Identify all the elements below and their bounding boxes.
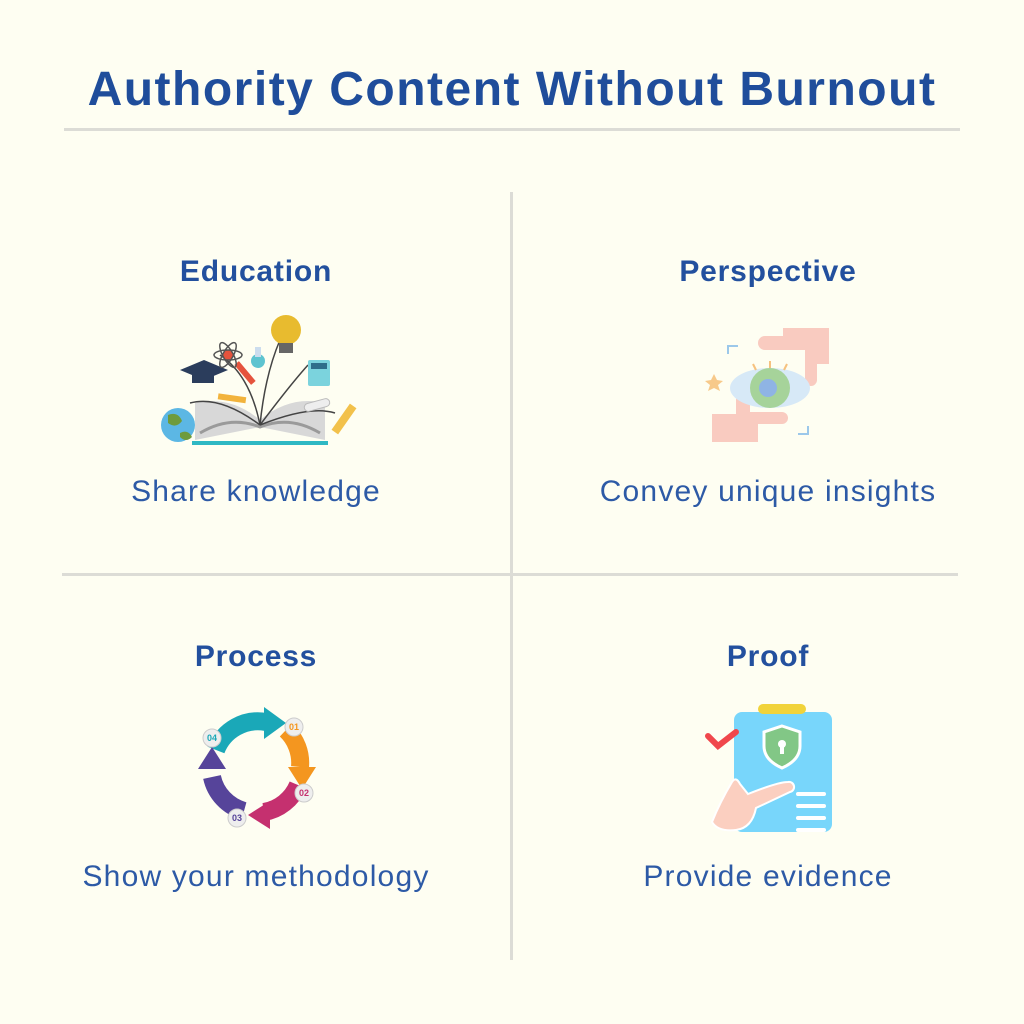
icon: eye framed by hands bbox=[705, 328, 829, 442]
icon: cycle arrows bbox=[198, 707, 316, 829]
panel: education bbox=[131, 255, 381, 508]
panel: process bbox=[82, 640, 430, 893]
heading: Process: Process bbox=[195, 640, 317, 673]
text: provide evidence: Provide evidence bbox=[643, 860, 893, 893]
icon: cycle arrows: 02 bbox=[299, 788, 309, 798]
panel: proof bbox=[643, 640, 893, 893]
text: convey unique insights: Convey unique insights bbox=[600, 475, 936, 508]
icon: open book with ideas bbox=[161, 315, 356, 445]
text: show your methodology: Show your methodology bbox=[82, 860, 430, 893]
icon: cycle arrows: 01 bbox=[289, 722, 299, 732]
icon: cycle arrows: 04 bbox=[207, 733, 217, 743]
heading: Perspective: Perspective bbox=[679, 255, 857, 288]
heading: Education: Education bbox=[180, 255, 332, 288]
text: share knowledge: Share knowledge bbox=[131, 475, 381, 508]
icon: cycle arrows: 03 bbox=[232, 813, 242, 823]
title: Authority Content Without Burnout bbox=[88, 63, 936, 116]
panel: perspective bbox=[600, 255, 936, 508]
icon: clipboard with shield bbox=[705, 704, 832, 832]
heading: Proof: Proof bbox=[727, 640, 809, 673]
